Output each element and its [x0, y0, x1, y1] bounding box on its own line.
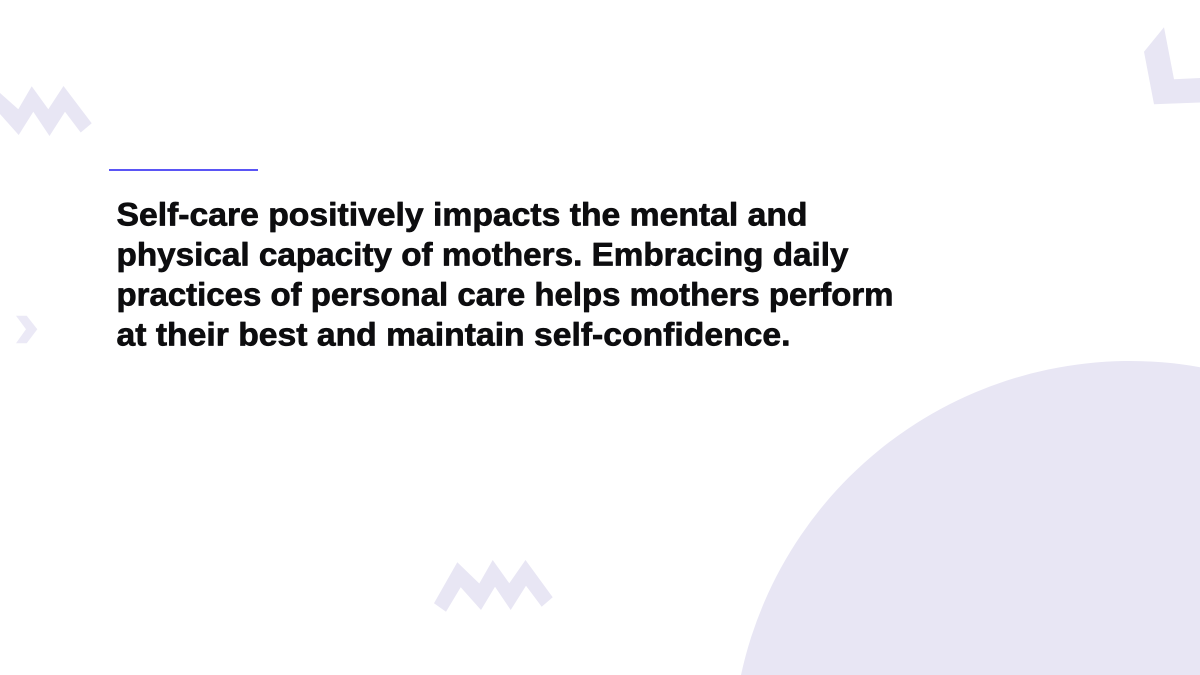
decorative zigzag, bottom centre: [434, 560, 553, 612]
main statement text: at their best and maintain self-confidence.: [116, 316, 790, 352]
main statement text: practices of personal care helps mothers perform: [116, 276, 894, 312]
decorative chevron, left: [16, 316, 37, 343]
main statement text: Self-care positively impacts the mental and: [116, 196, 807, 232]
accent line above the text: [109, 169, 258, 171]
main statement text: physical capacity of mothers. Embracing daily: [116, 236, 849, 272]
decorative corner shape, top right: [1144, 27, 1200, 104]
decorative zigzag, top left: [0, 86, 92, 136]
main statement text: [116, 196, 894, 352]
decorative large circle, bottom right: [741, 361, 1200, 675]
